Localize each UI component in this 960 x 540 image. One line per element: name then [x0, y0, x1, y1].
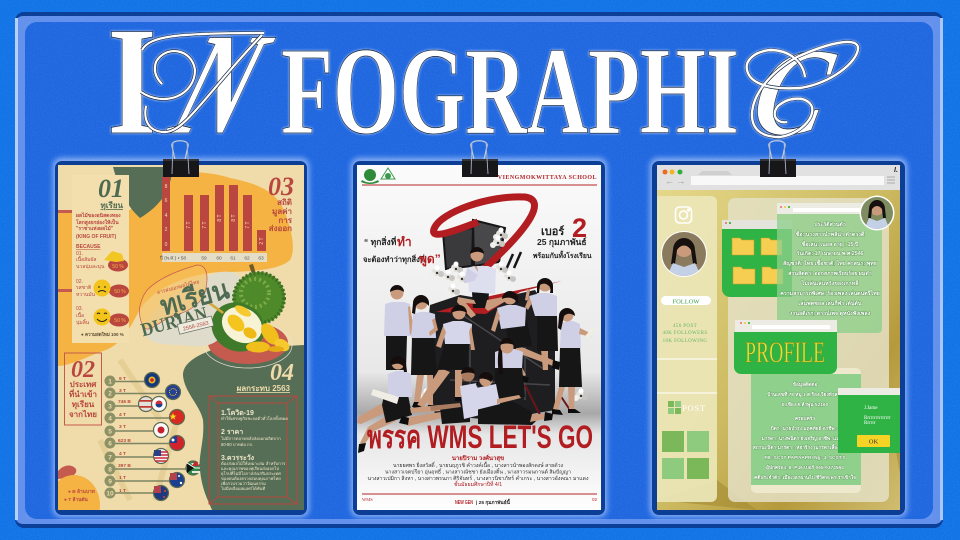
box 02 heading: ทุเรียน: [72, 399, 95, 410]
title letters FOGRAPHI: FOGRAPHI: [281, 23, 739, 161]
box 02 heading: ประเทศ: [70, 380, 97, 389]
impact box: 2 ราคา: [221, 429, 243, 436]
header rule: [362, 184, 597, 186]
intro text: [75, 212, 121, 240]
candidate names: [367, 454, 589, 488]
orange circle bottom-left: [58, 475, 100, 510]
student: standing boy left: [384, 285, 414, 370]
profile stats: 456 POST: [673, 324, 697, 329]
post icon: [668, 401, 681, 414]
profile contact window: FB: SCST PAPIYAPRI Ng: 4. SCST.S: [764, 455, 846, 461]
green lower blob: [183, 345, 304, 510]
ranking chart with flags: 1: [108, 378, 112, 386]
card 2: school election poster: [351, 158, 607, 517]
pale texture: [100, 360, 180, 500]
impact box: 60-80 บาทต่อ กก.: [221, 442, 253, 447]
footer rule: [362, 494, 597, 495]
heading export statistics: สถิติ: [277, 198, 292, 207]
profile contact window: ผู้ปกครอง: 8. P46 เบอร์ 065-9374594: [766, 464, 844, 472]
student group photo: [357, 247, 596, 453]
school name: VIENGMOKWITTAYA SCHOOL: [498, 175, 597, 181]
box 02 heading: 02: [71, 357, 95, 383]
bar chart: export value: 4: [165, 213, 168, 219]
number 03: 03: [268, 172, 294, 201]
sidebar panel 01: [72, 174, 129, 343]
popup dialog: Rrrrrrrrrrrrrrr: [864, 416, 891, 421]
binder clip 1: [163, 141, 199, 177]
because list: เนื้อสัมผัส: [76, 254, 96, 263]
impact box: และคุณภาพของทุเรียนส่งออกไป: [221, 465, 280, 472]
because list: รสชาติ: [76, 284, 91, 291]
profile heading: PROFILE: [745, 336, 825, 369]
post thumbnails: [662, 431, 709, 479]
face icon 2: [94, 308, 129, 326]
personal info window: ประวัติส่วนตัว: [814, 221, 846, 228]
gold background: [657, 165, 900, 510]
popup dialog: [838, 388, 900, 453]
profile contact window: มารดา: นางพนิดา ยังเจริญ อาชีพ: แม่บ้าน: [762, 435, 849, 442]
orange outline blob: [139, 265, 207, 329]
tagline left: ทำ: [397, 235, 412, 249]
personal info window: ชื่อ: นางสาวนำพลิน่า ดำดวงดี: [795, 230, 865, 238]
student: girl far right with book: [552, 308, 596, 415]
instagram icon: [676, 207, 692, 223]
durian illustration: [208, 264, 290, 352]
tagline right: เบอร์: [541, 225, 564, 238]
title letter N: N: [154, 3, 288, 165]
because list: นุ่มลิ้น: [76, 317, 90, 326]
box 02 heading: ที่นำเข้า: [69, 388, 97, 399]
number 01: 01: [98, 174, 124, 203]
bar chart: export value: 0: [165, 242, 168, 248]
profile contact window: บิดา: นายบำรุง มฤคทัยย์ อาชีพ: -: [771, 425, 840, 432]
ok button: OK: [869, 438, 878, 446]
left sidebar panel: [657, 196, 717, 502]
ranking chart with flags: 10: [106, 490, 114, 498]
bar chart: export value: 63: [258, 256, 264, 262]
ranking chart with flags: 7: [108, 454, 112, 462]
candidate names: นายปิราม วงศ์นาสุข: [452, 454, 504, 462]
tagline right: พร้อมกันทั้งโรงเรียน: [532, 250, 592, 260]
ranking chart with flags: 4 T: [119, 412, 126, 418]
because list: 03.: [76, 306, 83, 312]
personal info window: ไม่เล่นเล่นหวังของเกาหลี: [801, 279, 858, 287]
ranking chart with flags: 8: [108, 466, 112, 474]
cream paper background: [58, 165, 304, 510]
candidate names: นายยศพร ยิ่งสวัสดิ์ , นายนฤภูวชิ คำวงค์เนื้อ , นางสาวนำพองสักดงษ์ สายด้วง: [393, 461, 563, 469]
intro text: (KING OF FRUIT): [76, 234, 117, 240]
personal info window: ความสามารถพิเศษ: ร้องเพลง เล่นดนตรีไทย: [780, 289, 880, 297]
profile avatar small: [860, 196, 894, 230]
box 02 heading: จากไทย: [69, 409, 97, 419]
tagline left: จะต้องทำว่าทุกสิ่งที่: [363, 253, 425, 264]
footer: WMS: [362, 497, 373, 502]
bar chart: export value: 8 T: [217, 214, 223, 222]
ranking chart with flags: 746 B: [118, 399, 131, 405]
footer: | 25 กุมภาพันธ์นี้: [476, 498, 511, 506]
browser toolbar: I.: [894, 167, 898, 174]
personal info window: สัญชาติ: ไทย เชื้อชาติ: ไทย ศาสนา: พุทธ: [783, 258, 877, 267]
bar chart: export value: 7 T: [202, 221, 208, 229]
impact box: 3.ควรระวัง: [221, 454, 255, 462]
durian plate: [208, 322, 288, 364]
ranking chart with flags: 4: [108, 416, 112, 422]
dark green blob: [113, 167, 172, 218]
ranking chart with flags: 1 T: [119, 488, 126, 494]
student: girl centre-right: [491, 291, 560, 383]
legend: [64, 488, 95, 502]
bar chart: export value: 2 T: [259, 237, 265, 245]
ranking chart with flags: 3: [108, 404, 112, 410]
title letter C: C: [742, 23, 845, 162]
student: boy reclining: [399, 367, 480, 426]
browser toolbar: [657, 165, 900, 190]
ranking chart with flags: 6: [108, 440, 112, 448]
impact box: เพื่อรวบรวมว่าวัฒนธรรม: [221, 480, 266, 486]
because list: 02.: [76, 279, 83, 285]
durian title text: สารส่งออกผลไม้ไทย: [156, 278, 200, 296]
face icon 1: [94, 280, 129, 298]
ranking chart with flags: 3 T: [119, 388, 126, 394]
because list: 01.: [76, 251, 83, 257]
ranking chart with flags: 4 T: [119, 451, 126, 457]
legend: ● T ล้านตัน: [64, 496, 89, 503]
impact box: ของตนต้องตรวจสอบคุณภาพไทย: [221, 475, 281, 482]
bar chart: export value: 61: [230, 256, 236, 262]
tagline right: 2: [572, 213, 587, 243]
personal info window: เล่นฟุตซอล เล่นกีฬา เต้นต้น: [798, 299, 862, 307]
folder icons: [732, 238, 783, 284]
main panel: [728, 198, 889, 502]
bar chart: export value: 7 T: [186, 221, 192, 229]
bar chart: export value: 2: [165, 227, 168, 233]
ranking chart with flags: 9 T: [119, 376, 126, 382]
student: top boy on chair: [457, 247, 506, 318]
profile stats: 40K FOLLOWERS: [662, 331, 708, 336]
title flourish C: [747, 42, 858, 137]
profile contact window: ข้อมูลติดต่อ: [793, 381, 817, 389]
title: INFOGRAPHIC: [107, 0, 858, 167]
ranking chart with flags: 623 B: [118, 438, 131, 444]
durian title text: [140, 280, 230, 336]
years badge: [177, 316, 214, 334]
red number swash upper: [434, 197, 535, 268]
tagline right: 25 กุมภาพันธ์: [537, 237, 587, 248]
binder clip 2: [462, 141, 498, 177]
bar chart: export value: 59: [201, 256, 207, 262]
binder clip 3: [760, 141, 796, 177]
red blob bottom-left: [58, 465, 76, 479]
personal info window: ส่วนสัดตา: ออกสภาพเรียบร้อย ผมดำ: [788, 269, 872, 277]
pulp icon: 50 %: [112, 264, 124, 270]
student: girl left: [411, 295, 438, 409]
card 3: profile browser mockup: [650, 158, 907, 517]
tagline left: [363, 235, 441, 267]
popup dialog: J.Jame: [864, 406, 878, 411]
school logos: [361, 168, 395, 184]
durian title text: DURIAN: [139, 303, 210, 341]
red number swash base: [436, 281, 562, 314]
profile stats: [662, 324, 708, 344]
green folder window: [722, 220, 792, 297]
profile heading window: [734, 320, 837, 374]
ranking chart with flags: 3 T: [119, 424, 126, 430]
follow button: [661, 296, 711, 306]
bar chart: export value: 60: [216, 256, 222, 262]
party slogan: พรรค WMS LET'S GO: [367, 419, 593, 455]
because list: BECAUSE: [76, 244, 101, 250]
box 02 heading: [64, 353, 102, 425]
heading impact 2563: ผลกระทบ 2563: [237, 384, 291, 393]
bar chart: export value: 8: [165, 184, 168, 190]
profile contact window: [751, 368, 861, 493]
because list: หวานมัน: [76, 292, 96, 298]
impact box: [209, 396, 297, 504]
years badge: 2558-2563: [182, 320, 209, 333]
impact box: ต้องส่งผลไม้ให้เหมาะสม สำหรับการ: [221, 460, 286, 466]
bar chart: export value: ปี (พ.ศ.) ▪ 58: [160, 254, 186, 262]
because list: นวลนุ่มละมุน: [76, 264, 105, 270]
profile contact window: คติประจำตัว: เมื่อเวลาผ่านไป ชีวิตจะพาเราเข้าใจ: [754, 473, 856, 481]
student: left seated girl: [357, 356, 412, 453]
personal info window: วันเกิด: 17 เมษายน พ.ศ 2546: [796, 250, 864, 257]
tagline right: [532, 213, 592, 260]
face icon 2: 50 %: [114, 318, 126, 324]
ranking chart with flags: 9: [108, 478, 112, 486]
black chair: [425, 220, 570, 420]
intro text: "ราชาแห่งผลไม้": [76, 225, 114, 232]
profile contact window: ครอบครัว: [795, 415, 815, 422]
intro text: โลกสูงยกย่องให้เป็น: [75, 218, 119, 227]
impact box: ไม่มีการตลาดหลังส่งออกผลิตจาก: [220, 435, 281, 441]
freshness note: ● ความสดใหม่ 100 %: [81, 331, 124, 337]
tagline left: “ ทุกสิ่งที่: [364, 235, 397, 248]
durian title text: ทุเรียน: [157, 274, 233, 323]
footer: [362, 497, 597, 506]
heading export statistics: มูลค่า: [272, 207, 292, 217]
personal info window: [777, 203, 882, 333]
ranking chart with flags: 397 B: [118, 463, 131, 469]
personal info window: งานอดิเรก: ดาวน์เพจ ดูหนังฟังเพลง: [790, 310, 871, 318]
bar chart: export value: 6: [165, 198, 168, 204]
footer: 02: [592, 497, 597, 502]
profile contact window: สถานะบิดา-มารดา : หย่าร้าง (มารดาเลี้ยงลูกเดี่ยว): [753, 443, 858, 452]
profile avatar: [660, 230, 708, 280]
title letter I: I: [107, 0, 157, 167]
ranking chart with flags: [104, 372, 200, 500]
ranking chart with flags: 2: [108, 390, 112, 398]
impact box: ทำให้เศรษฐกิจชะลอตัวทั่วโลกทั้งหมด: [221, 415, 288, 421]
number 04: 04: [270, 360, 294, 386]
profile stats: 10K FOLLOWING: [663, 339, 707, 344]
student: girl centre-left: [412, 305, 475, 412]
candidate names: ชั้นมัธยมศึกษาปีที่ 4/1: [454, 480, 502, 488]
orange blob: [58, 172, 293, 366]
tagline left: พูด”: [419, 252, 441, 267]
bar chart: export value: 7 T: [245, 221, 251, 229]
heading export statistics: ส่งออก: [269, 224, 292, 233]
footer: NEW GEN: [455, 500, 473, 506]
heading durian: ทุเรียน: [101, 200, 124, 211]
browser toolbar: ← →: [665, 176, 686, 186]
candidate names: นางสาวเปมิกา สิงหา , นางสาวพรนภา ศิริจันทร์ , นางสาวนิชาภัทร์ คำเกระ , นางสาวอังคณา มาแดง: [367, 475, 589, 482]
personal info window: ชื่อเล่น: เนอส อายุ : 15 ปี: [801, 240, 859, 248]
popup dialog: Rrrrrr: [864, 421, 876, 426]
impact box: ไม่มีเหลือเผยแพร่ได้ทันที: [220, 485, 265, 491]
bar chart: export value: [160, 177, 267, 262]
ranking chart with flags: 1 T: [119, 475, 126, 481]
red side marks: [58, 210, 72, 292]
follow button: FOLLOW: [672, 298, 700, 306]
intro text: ผลไม้ของอนิสดงทอง: [76, 212, 121, 219]
pulp icon: [104, 251, 128, 272]
white flowers: [418, 228, 588, 401]
card 1: durian infographic: [48, 158, 309, 535]
impact box: ยุโรปที่ไม่มีโอกาสส่งเสริมประเทศ: [221, 470, 281, 477]
legend: ● B ล้านบาท: [68, 488, 95, 495]
profile contact window: อ.เชียง จ.ลำพูน 52160: [782, 401, 829, 409]
post label: POST: [682, 403, 706, 413]
student: girl reclining: [476, 372, 553, 425]
student: girl right tall: [525, 278, 558, 370]
bar chart: export value: 8 T: [231, 214, 237, 222]
because list: [76, 244, 105, 326]
student: girl centre seated long hair: [495, 338, 525, 399]
face icon 1: 50 %: [114, 289, 126, 295]
title flourish N: [141, 33, 264, 132]
heading export statistics: [269, 198, 293, 233]
heading export statistics: การ: [278, 216, 293, 225]
grey title blob: [145, 272, 242, 346]
profile contact window: บ้านเลขที่ 78 หมู่ 1 ต.ร้องเวียงหัวสวร: [767, 390, 843, 399]
because list: เนื้อ: [76, 310, 84, 319]
candidate names: นางสาวเจตปรียา อุ่นฤทธิ์ , นางสาวณัชชา ยังเมืองติ้น , นางสาวรมนกานต์ สิมปัญญา: [385, 468, 571, 476]
impact box: 1.โควิด-19: [221, 408, 254, 417]
ranking chart with flags: 5: [108, 428, 112, 436]
bar chart: export value: 62: [244, 256, 250, 262]
